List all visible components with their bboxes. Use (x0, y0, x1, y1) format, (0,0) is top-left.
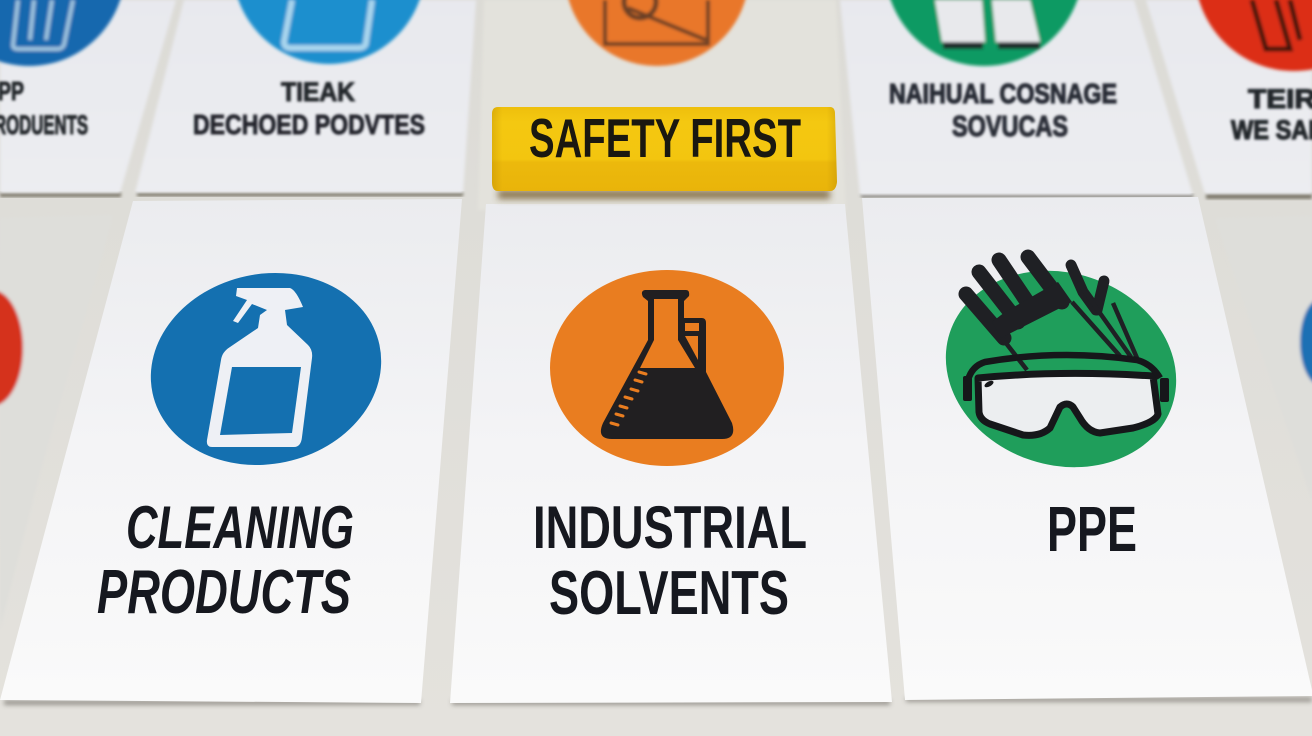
top card: blurred natural card: NAIHUAL COSNAGE (889, 78, 1117, 109)
heading: industrial solvents: SOLVENTS (549, 559, 789, 628)
panel: PPE card (862, 197, 1312, 702)
top card: far left (0, 0, 176, 197)
panel: industrial solvents card (450, 204, 892, 705)
top card: blurred natural card: SOVUCAS (952, 111, 1068, 143)
title: safety first tape: SAFETY FIRST (529, 107, 801, 169)
top card: blurred product card: DECHOED PODVTES (193, 109, 425, 140)
title: safety first tape (492, 107, 837, 191)
goggles (978, 373, 1158, 435)
top card: blurred natural card (840, 0, 1193, 197)
icon: spray bottle on blue circle (133, 252, 399, 486)
top card: blurred product card: TIEAK (281, 77, 355, 107)
top card: blurred product card (135, 0, 476, 196)
top card: far right (1146, 0, 1312, 199)
panel: top row of blurred cards (0, 0, 1312, 210)
heading: cleaning products: CLEANING (126, 494, 354, 561)
panel: cleaning products card (0, 199, 462, 705)
top card: far right: TEIR (1248, 84, 1312, 114)
top card: centre orange (478, 0, 846, 210)
shadow under tape (498, 190, 830, 199)
panel: far left lower card (0, 215, 113, 630)
heading: industrial solvents: INDUSTRIAL (533, 494, 807, 561)
icon: gloves and goggles on green circle (920, 242, 1202, 496)
heading: industrial solvents (533, 494, 807, 628)
heading: cleaning products (97, 494, 354, 627)
heading: PPE: PPE (1047, 493, 1137, 565)
heading: cleaning products: PRODUCTS (97, 558, 351, 627)
panel: far right lower card (1215, 216, 1312, 500)
icon: flask on orange circle (550, 270, 784, 466)
